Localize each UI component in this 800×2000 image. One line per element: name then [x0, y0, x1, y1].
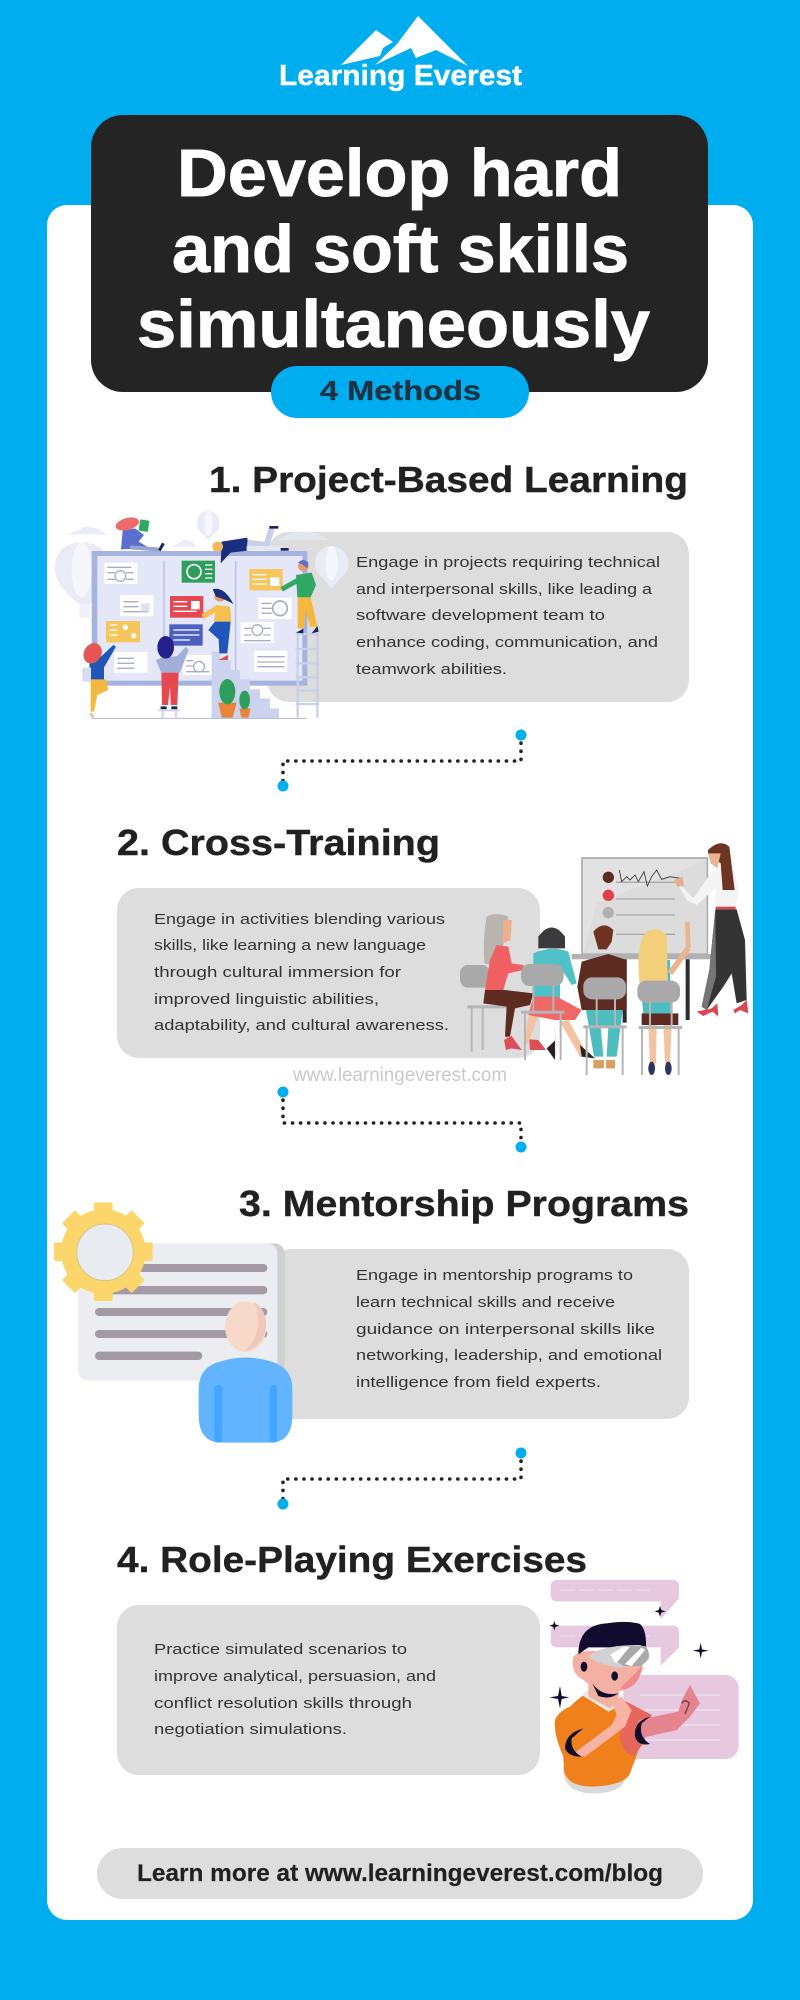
section 2 heading: 2. Cross-Training — [117, 822, 440, 863]
presenter — [677, 868, 739, 907]
watermark: www.learningeverest.com — [292, 1065, 507, 1086]
section 3 card: guidance on interpersonal skills like — [356, 1321, 655, 1338]
white content panel — [47, 205, 753, 1920]
footer pill: Learn more at www.learningeverest.com/blog — [137, 1860, 663, 1887]
top reader — [121, 528, 150, 549]
section 3 card: networking, leadership, and emotional — [356, 1347, 662, 1364]
section 1 heading: 1. Project-Based Learning — [209, 459, 688, 500]
section 2 card: adaptability, and cultural awareness. — [154, 1017, 449, 1034]
section 4 card: Practice simulated scenarios to — [154, 1641, 407, 1658]
yellow woman climbing — [214, 605, 231, 622]
section 1 card: enhance coding, communication, and — [356, 634, 658, 651]
blue jumper woman — [89, 645, 116, 681]
leaning man — [221, 538, 248, 563]
section 1 card: Engage in projects requiring technical — [356, 554, 660, 571]
section 1 card: teamwork abilities. — [356, 661, 507, 678]
green shirt man — [296, 573, 316, 597]
section 3 card: Engage in mentorship programs to — [356, 1267, 633, 1284]
woman 2 — [523, 1013, 595, 1058]
section 4 card: improve analytical, persuasion, and — [154, 1668, 436, 1685]
section 4 card — [117, 1605, 540, 1775]
man 3 — [593, 925, 613, 949]
section 2 card — [117, 888, 540, 1058]
section 1 card: software development team to — [356, 607, 605, 624]
woman 4 — [638, 960, 671, 1013]
footer pill — [97, 1848, 703, 1899]
subtitle pill: 4 Methods: 4 Methods — [320, 375, 481, 406]
chair and woman left — [472, 1007, 507, 1052]
title panel: and soft skills — [172, 212, 629, 287]
woman with dark hair — [156, 647, 189, 673]
section 2 card: through cultural immersion for — [154, 964, 401, 981]
connector 1 — [278, 730, 526, 792]
illustration: person in VR headset with speech bubbles — [549, 1580, 739, 1793]
section 3 card — [270, 1249, 689, 1419]
section 4 card: negotiation simulations. — [154, 1721, 347, 1738]
section 3 card: intelligence from field experts. — [356, 1374, 601, 1391]
title panel: simultaneously — [137, 287, 650, 362]
subtitle pill: 4 Methods — [271, 366, 529, 418]
logo: Learning Everest — [279, 16, 522, 92]
illustration: classroom with presenter — [460, 843, 748, 1075]
illustration: team at project board — [55, 511, 348, 718]
section 2 card: Engage in activities blending various — [154, 911, 445, 928]
title panel — [91, 115, 708, 392]
section 2 card: improved linguistic abilities, — [154, 991, 379, 1008]
section 3 card: learn technical skills and receive — [356, 1294, 615, 1311]
section 1 card — [267, 532, 689, 702]
logo: Learning Everest: Learning Everest — [279, 60, 522, 92]
section 4 heading: 4. Role-Playing Exercises — [117, 1539, 587, 1580]
section 4 card: conflict resolution skills through — [154, 1695, 412, 1712]
illustration: mentor with document and gear — [54, 1202, 292, 1443]
connector 2 — [278, 1086, 526, 1152]
section 3 heading: 3. Mentorship Programs — [239, 1183, 689, 1224]
connector 3 — [278, 1448, 526, 1510]
section 2 card: skills, like learning a new language — [154, 937, 426, 954]
section 1 card: and interpersonal skills, like leading a — [356, 581, 653, 598]
title panel: Develop hard — [177, 136, 622, 211]
